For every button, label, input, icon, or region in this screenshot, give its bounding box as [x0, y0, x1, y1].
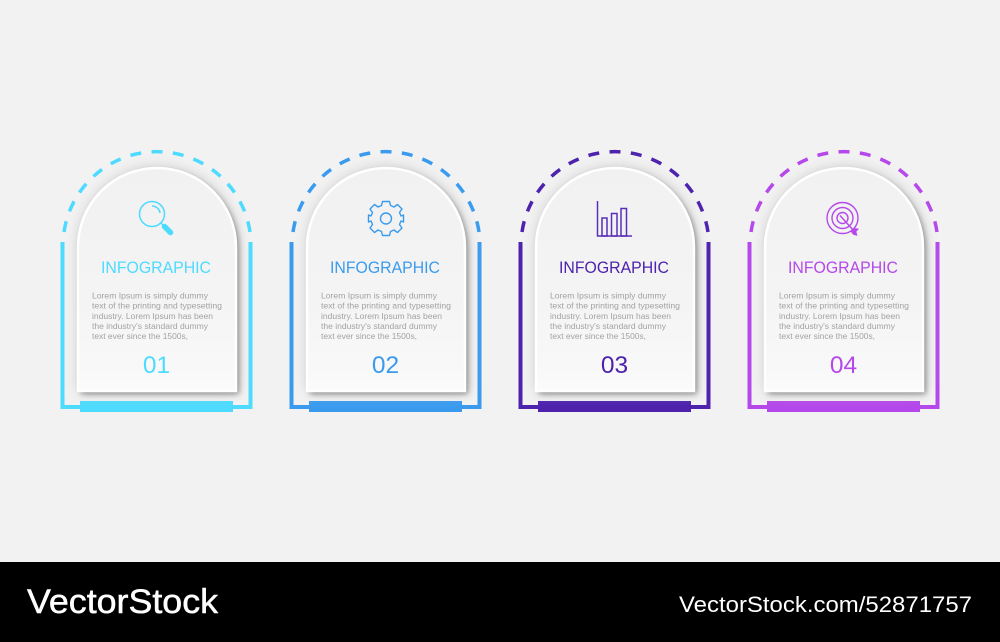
card: [765, 168, 926, 394]
body text: text of the printing and typesetting: [779, 301, 909, 311]
body text: industry. Lorem Ipsum has been: [321, 311, 442, 321]
card: [307, 168, 468, 394]
body text: Lorem Ipsum is simply dummy: [92, 290, 209, 300]
heading: INFOGRAPHIC: [101, 259, 211, 277]
body text: the industry's standard dummy: [550, 321, 667, 331]
icon: magnifier: [140, 202, 170, 232]
panel: step 01: [62, 152, 250, 412]
number: 01: [143, 352, 170, 379]
body text: industry. Lorem Ipsum has been: [92, 311, 213, 321]
body text: Lorem Ipsum is simply dummy: [779, 290, 896, 300]
icon: bar chart: [598, 201, 632, 236]
body text: Lorem Ipsum is simply dummy: [550, 290, 667, 300]
dashed arc: [64, 152, 250, 232]
bottom bar: [538, 401, 691, 412]
body text: [550, 290, 680, 341]
body text: [321, 290, 451, 341]
body text: the industry's standard dummy: [92, 321, 209, 331]
bottom bar: [80, 401, 233, 412]
body text: text of the printing and typesetting: [550, 301, 680, 311]
body text: [779, 290, 909, 341]
bracket frame: [62, 242, 250, 407]
body text: the industry's standard dummy: [779, 321, 896, 331]
heading: INFOGRAPHIC: [559, 259, 669, 277]
bracket frame: [292, 242, 480, 407]
card: [536, 168, 697, 394]
body text: text ever since the 1500s,: [550, 331, 646, 341]
bottom bar: [309, 401, 462, 412]
footer url: VectorStock.com/52871757: [679, 592, 972, 617]
body text: text of the printing and typesetting: [92, 301, 222, 311]
body text: text of the printing and typesetting: [321, 301, 451, 311]
number: 04: [830, 352, 857, 379]
body text: [92, 290, 222, 341]
body text: the industry's standard dummy: [321, 321, 438, 331]
body text: text ever since the 1500s,: [779, 331, 875, 341]
body text: text ever since the 1500s,: [92, 331, 188, 341]
bracket frame: [750, 242, 938, 407]
heading: INFOGRAPHIC: [788, 259, 898, 277]
dashed arc: [751, 152, 937, 232]
panel: step 02: [292, 152, 480, 412]
number: 03: [601, 352, 628, 379]
footer logo: VectorStock: [27, 583, 219, 621]
number: 02: [372, 352, 399, 379]
bracket frame: [520, 242, 708, 407]
icon: target: [827, 202, 858, 236]
body text: industry. Lorem Ipsum has been: [550, 311, 671, 321]
body text: industry. Lorem Ipsum has been: [779, 311, 900, 321]
heading: INFOGRAPHIC: [330, 259, 440, 277]
bottom bar: [767, 401, 920, 412]
icon: gear: [368, 202, 404, 236]
card: [78, 168, 239, 394]
dashed arc: [293, 152, 479, 232]
footer band: [0, 562, 1000, 642]
dashed arc: [522, 152, 708, 232]
panel: step 04: [750, 152, 938, 412]
body text: text ever since the 1500s,: [321, 331, 417, 341]
body text: Lorem Ipsum is simply dummy: [321, 290, 438, 300]
panel: step 03: [520, 152, 708, 412]
